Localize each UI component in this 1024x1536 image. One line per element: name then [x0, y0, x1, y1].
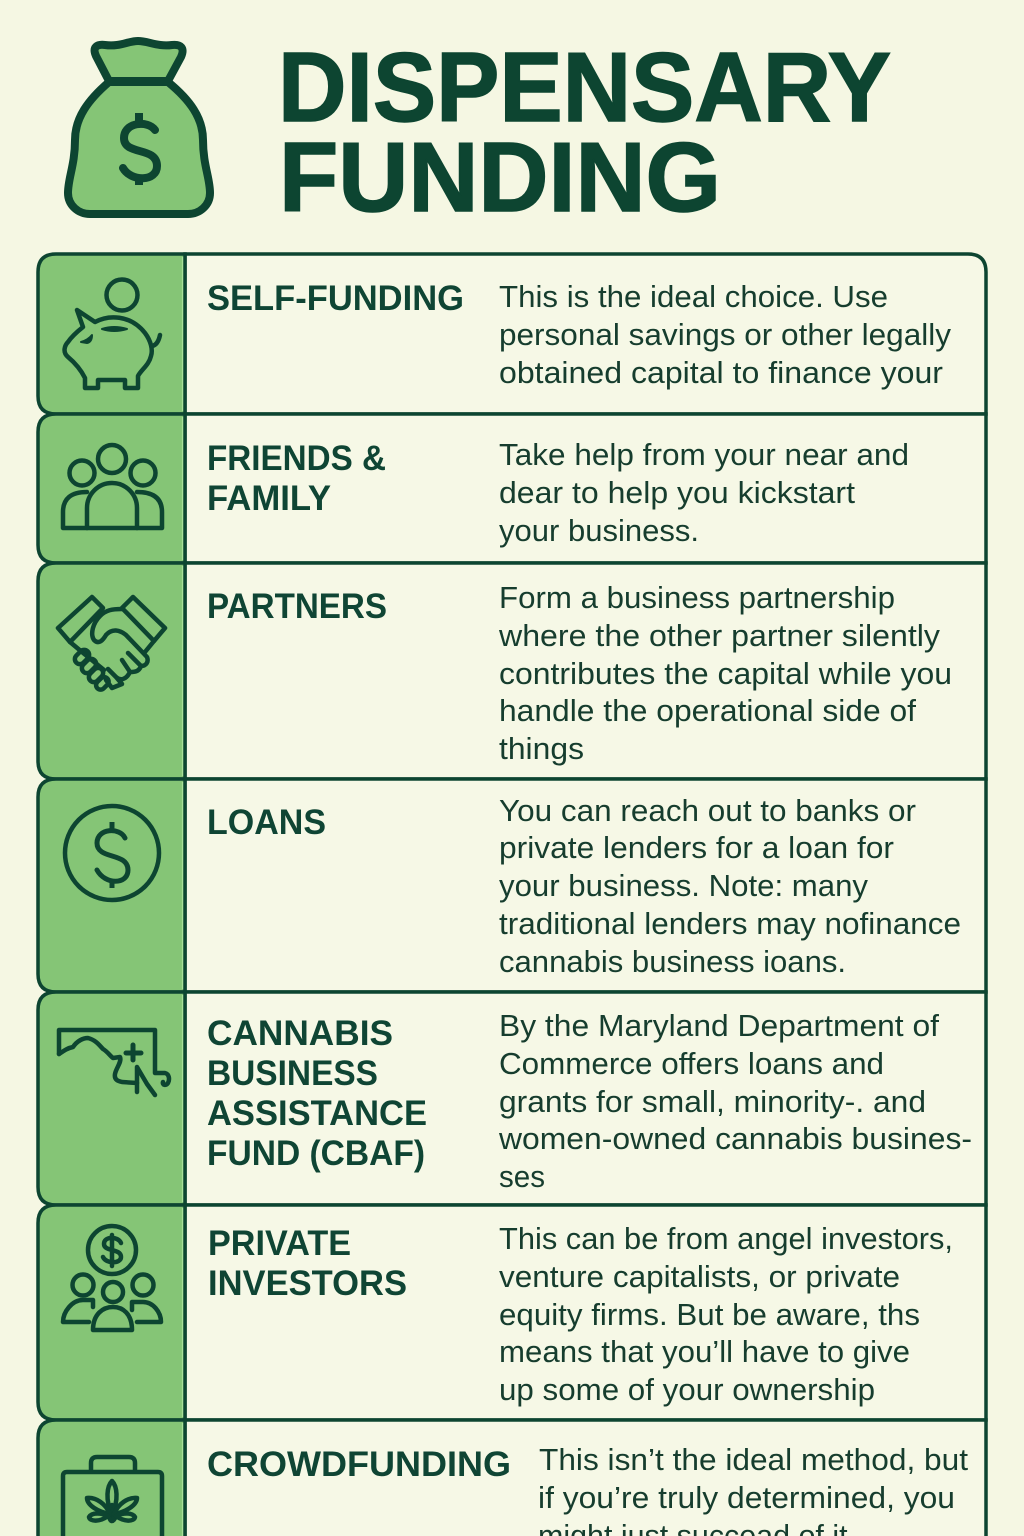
description: obtained capital to finance your	[499, 355, 943, 390]
description: This isn’t the ideal method, but	[539, 1442, 968, 1477]
panel: private investors	[38, 1205, 986, 1420]
description: women-owned cannabis busines-	[498, 1121, 972, 1156]
description: dear to help you kickstart	[499, 475, 855, 510]
description: contributes the capital while you	[499, 656, 952, 691]
description: This is the ideal choice. Use	[499, 279, 888, 314]
description: up some of your ownership	[499, 1372, 875, 1407]
panel: friends and family	[38, 414, 986, 563]
heading: LOANS	[207, 803, 326, 842]
panel: loans	[38, 779, 986, 992]
description: handle the operational side of	[499, 693, 916, 728]
description: ses	[499, 1159, 545, 1194]
icon: handshake	[58, 597, 165, 691]
heading: FAMILY	[207, 479, 331, 518]
heading	[208, 1224, 407, 1303]
heading: FRIENDS &	[207, 439, 386, 478]
description	[498, 580, 952, 766]
description: By the Maryland Department of	[499, 1008, 939, 1043]
heading: CANNABIS	[207, 1014, 393, 1053]
description	[499, 1221, 953, 1407]
description: your business.	[499, 513, 699, 548]
title	[278, 32, 891, 232]
icon: dollar coin	[65, 806, 159, 900]
description: traditional lenders may nofinance	[499, 906, 961, 941]
icon: medical case with cannabis leaf	[63, 1457, 162, 1536]
heading: ASSISTANCE	[207, 1094, 427, 1133]
description: Form a business partnership	[499, 580, 895, 615]
panel: self-funding	[38, 254, 986, 414]
heading: PARTNERS	[207, 587, 387, 626]
heading: FUND (CBAF)	[207, 1134, 425, 1173]
icon: group of people	[63, 445, 162, 528]
panel: partners	[38, 563, 986, 779]
description: Take help from your near and	[499, 437, 909, 472]
description: private lenders for a loan for	[499, 830, 894, 865]
description: This can be from angel investors,	[499, 1221, 953, 1256]
title: FUNDING	[279, 122, 721, 232]
panel: crowdfunding	[38, 1420, 986, 1536]
description: equity firms. But be aware, ths	[499, 1297, 920, 1332]
icon: money bag	[68, 41, 210, 214]
description: grants for small, minority-. and	[499, 1084, 926, 1119]
heading	[207, 1014, 427, 1173]
heading: BUSINESS	[207, 1054, 378, 1093]
description	[498, 1008, 972, 1194]
description: personal savings or other legally	[499, 317, 951, 352]
description	[499, 279, 951, 390]
description: if you’re truly determined, you	[538, 1480, 955, 1515]
icon: Maryland map	[59, 1030, 169, 1095]
description: things	[499, 731, 584, 766]
panel: cannabis business assistance fund	[38, 992, 986, 1205]
title: DISPENSARY	[278, 32, 891, 142]
heading	[207, 439, 386, 518]
description: where the other partner silently	[498, 618, 941, 653]
description	[499, 793, 961, 979]
heading: INVESTORS	[208, 1264, 407, 1303]
description: You can reach out to banks or	[499, 793, 916, 828]
description	[499, 437, 909, 548]
heading: PRIVATE	[208, 1224, 351, 1263]
heading: CROWDFUNDING	[207, 1445, 511, 1484]
description: venture capitalists, or private	[499, 1259, 900, 1294]
icon: investors with coin	[63, 1226, 161, 1330]
heading: SELF-FUNDING	[207, 279, 464, 318]
description: means that you’ll have to give	[499, 1334, 910, 1369]
description: cannabis business ioans.	[499, 944, 846, 979]
icon: piggy bank	[65, 280, 160, 388]
description: your business. Note: many	[499, 868, 868, 903]
description	[538, 1442, 968, 1536]
description: Commerce offers loans and	[499, 1046, 884, 1081]
